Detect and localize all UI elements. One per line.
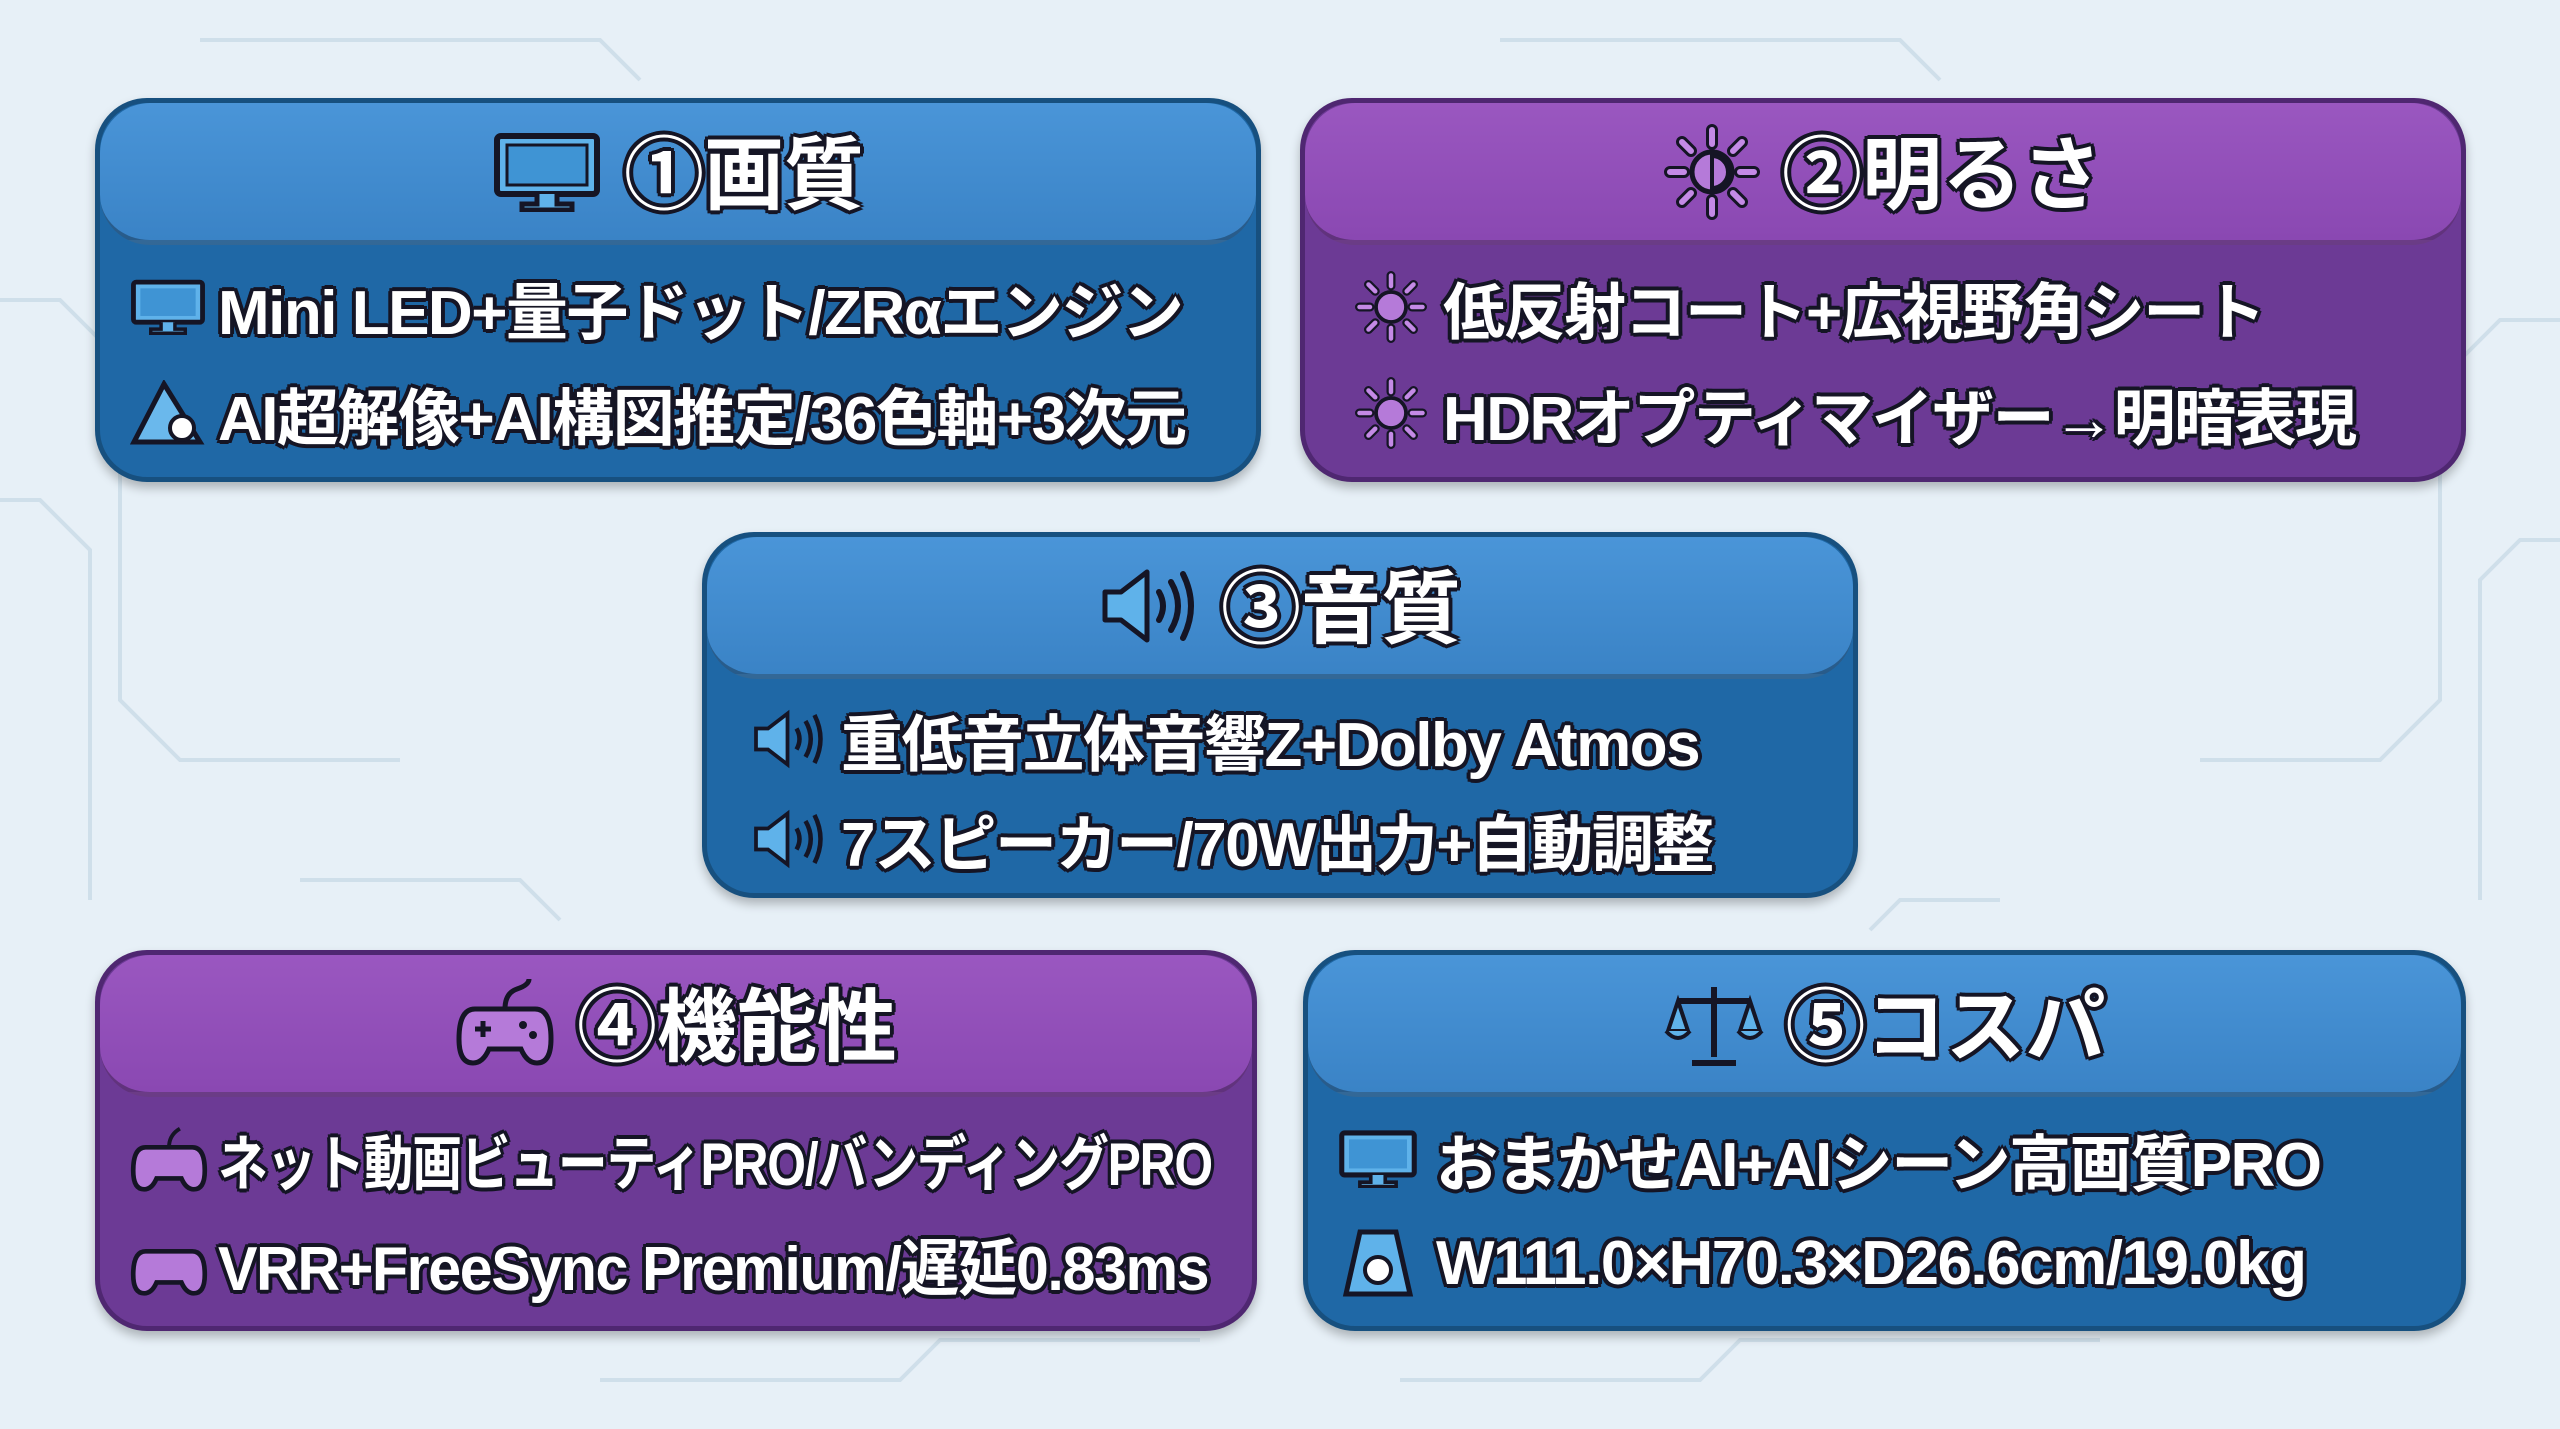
heading: sound: ③音質 [1221, 564, 1461, 654]
panel: brightness [1300, 98, 2466, 482]
text: line 1: 重低音立体音響Z+Dolby Atmos [841, 711, 1699, 780]
heading: cost performance [1308, 955, 2461, 1097]
heading: functionality: ④機能性 [577, 982, 897, 1072]
text: line 2: HDRオプティマイザー→明暗表現 [1443, 385, 2356, 454]
panel: sound [702, 532, 1858, 898]
panel: cost performance [1303, 950, 2466, 1331]
heading: picture quality [100, 103, 1256, 245]
heading: cost performance: ⑤コスパ [1786, 982, 2106, 1072]
text: line 2: 7スピーカー/70W出力+自動調整 [841, 811, 1713, 880]
heading: functionality [100, 955, 1252, 1097]
text: line 1: 低反射コート+広視野角シート [1443, 279, 2264, 348]
heading: brightness: ②明るさ [1782, 130, 2102, 220]
text: line 2: VRR+FreeSync Premium/遅延0.83ms [218, 1235, 1208, 1304]
heading: picture quality: ①画質 [624, 130, 864, 220]
text: line 2: W111.0×H70.3×D26.6cm/19.0kg [1436, 1228, 2306, 1298]
text: line 2: AI超解像+AI構図推定/36色軸+3次元 [218, 385, 1186, 454]
panel: functionality [95, 950, 1257, 1331]
text: line 1: Mini LED+量子ドット/ZRαエンジン [218, 279, 1182, 348]
heading: sound [707, 537, 1853, 679]
text: line 1: ネット動画ビューティPRO/バンディングPRO [218, 1130, 1212, 1198]
panel: picture quality [95, 98, 1261, 482]
text: line 1: おまかせAI+AIシーン高画質PRO [1436, 1131, 2320, 1200]
heading: brightness [1305, 103, 2461, 245]
